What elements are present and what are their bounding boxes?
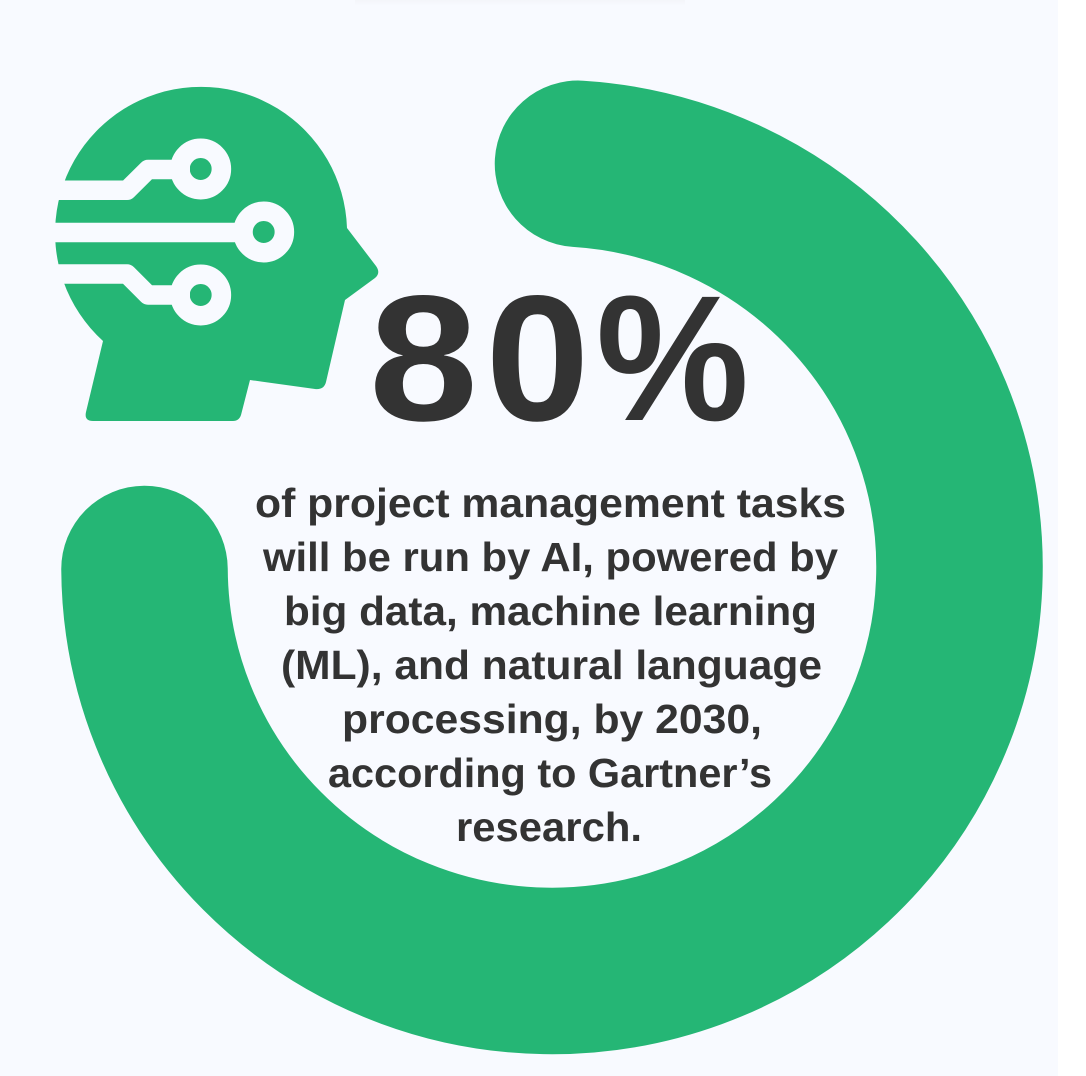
big statistic: 80%: 8 — [369, 258, 478, 458]
description text: processing, by 2030, — [342, 696, 762, 742]
head silhouette — [55, 87, 378, 421]
description text: (ML), and natural language — [281, 642, 822, 688]
icon: AI head with circuit traces — [50, 87, 378, 421]
big statistic: 80%: % — [596, 258, 749, 458]
circuit trace: bottom — [50, 274, 221, 316]
description text: research. — [456, 804, 642, 850]
description text: big data, machine learning — [284, 588, 817, 634]
description text: according to Gartner’s — [328, 750, 772, 796]
big statistic: 80%: 0 — [486, 258, 590, 458]
description text: of project management tasks — [255, 480, 846, 526]
circuit trace: top — [50, 148, 221, 190]
circuit trace: middle — [50, 211, 284, 253]
progress ring: 80 percent arc — [144, 164, 959, 971]
description text: will be run by AI, powered by — [262, 534, 838, 580]
description text — [255, 480, 846, 850]
